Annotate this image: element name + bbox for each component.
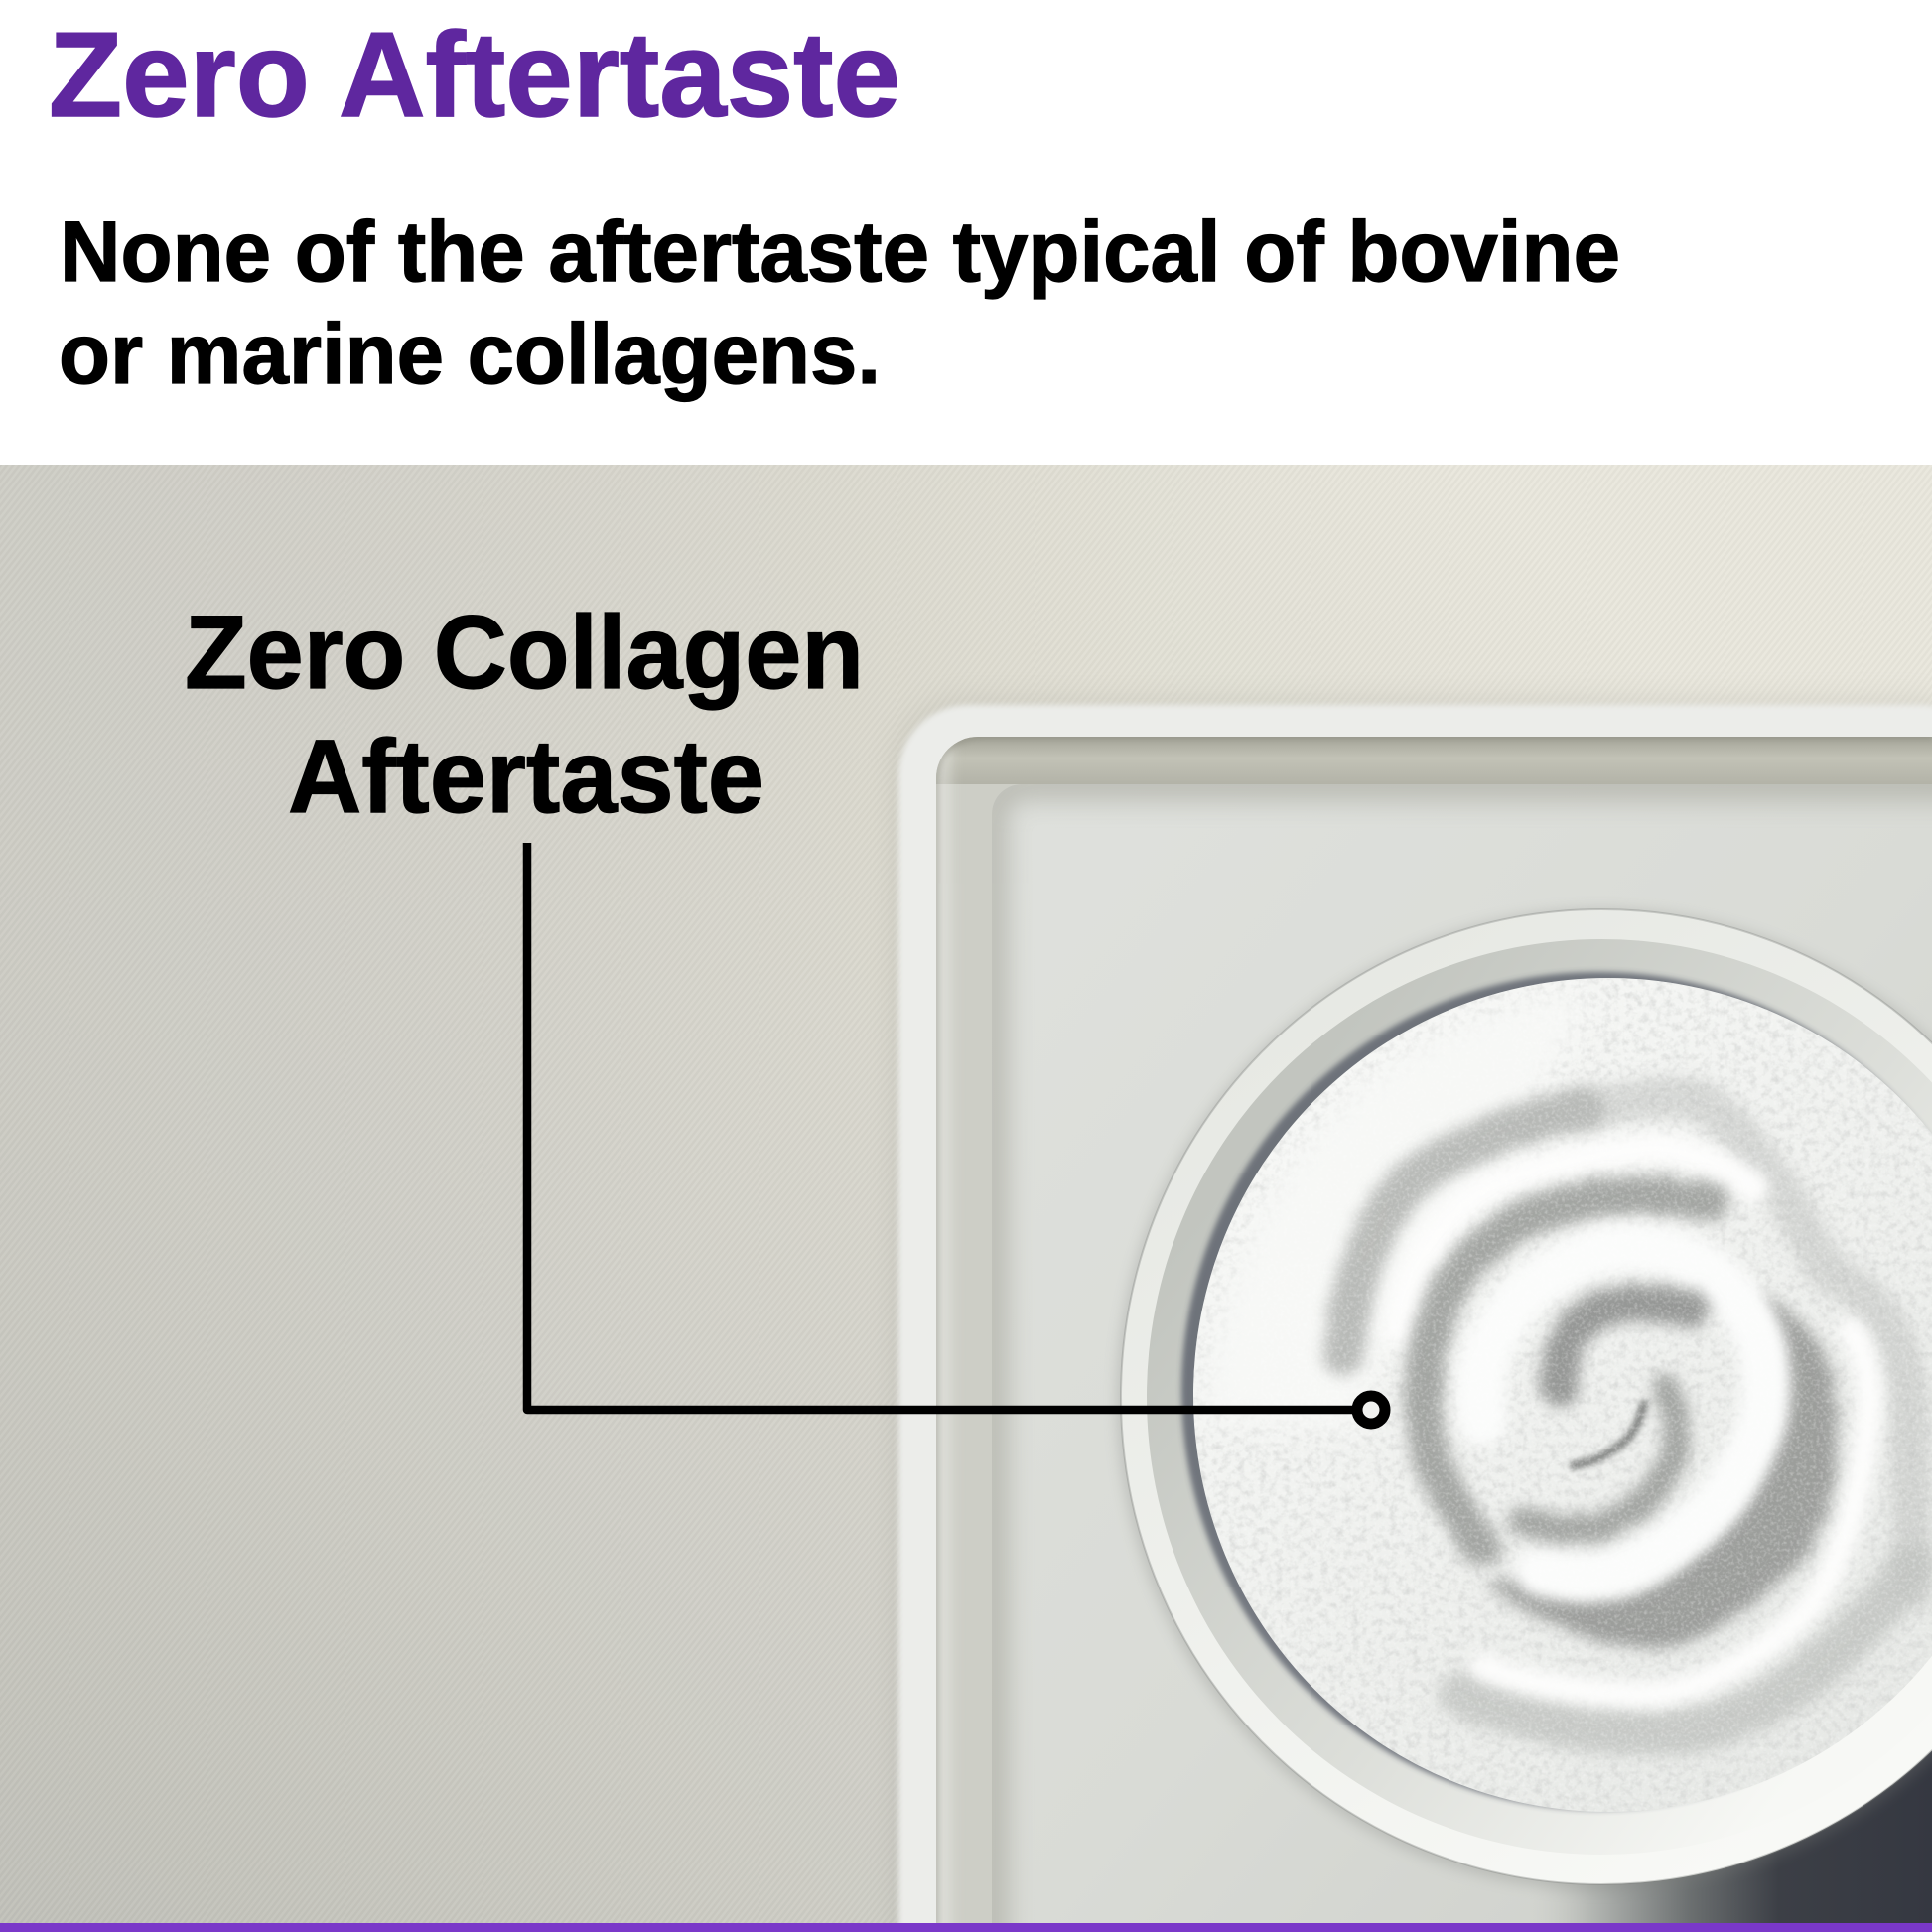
callout label: Aftertaste — [288, 719, 764, 835]
upper white highlight — [1400, 1148, 1753, 1331]
bowl inner wall — [1147, 939, 1932, 1855]
tray floor — [992, 784, 1932, 1932]
lower faint swirl band — [1462, 1566, 1911, 1732]
fine white powder grain — [1181, 963, 1932, 1827]
outer gray swirl band — [1343, 1109, 1584, 1354]
bottom purple bar — [0, 1923, 1932, 1932]
photo panel: powder bowl on tray — [0, 465, 1932, 1932]
dark corner — [1558, 1751, 1932, 1923]
tray — [894, 699, 1932, 1932]
second gray swirl band — [1424, 1195, 1710, 1549]
powder surface — [1181, 963, 1932, 1827]
bowl outer rim — [1121, 909, 1932, 1884]
smooth upper-left powder — [1201, 993, 1588, 1430]
subtitle text block: or marine collagens. — [59, 307, 881, 402]
lower white highlight — [1482, 1331, 1869, 1694]
powder swirl — [1343, 1097, 1916, 1732]
fabric background — [0, 465, 1932, 1932]
inner lower gray swirl — [1521, 1388, 1676, 1529]
title: Zero Aftertaste — [49, 7, 900, 142]
subtitle text block: None of the aftertaste typical of bovine — [60, 205, 1620, 300]
tray rim — [898, 705, 1932, 1932]
outer gray band continuation — [1584, 1097, 1916, 1588]
thick gray crescent band — [1482, 1293, 1837, 1649]
floor inner shadow — [992, 784, 1932, 1932]
dark shadow around powder — [1181, 972, 1932, 1810]
callout label: Zero Collagen — [185, 595, 864, 711]
tray channel — [936, 737, 1932, 1932]
bowl — [1117, 909, 1932, 1890]
bowl shadow — [1117, 909, 1932, 1890]
callout label — [185, 595, 864, 835]
inner white ring — [1480, 1248, 1766, 1577]
inner gray lobe — [1560, 1304, 1691, 1388]
callout leader line with marker — [527, 843, 1385, 1424]
center swirl tail — [1574, 1404, 1644, 1465]
tray shadow — [903, 697, 1931, 739]
subtitle text block — [59, 205, 1620, 402]
powder grain — [1181, 963, 1932, 1827]
